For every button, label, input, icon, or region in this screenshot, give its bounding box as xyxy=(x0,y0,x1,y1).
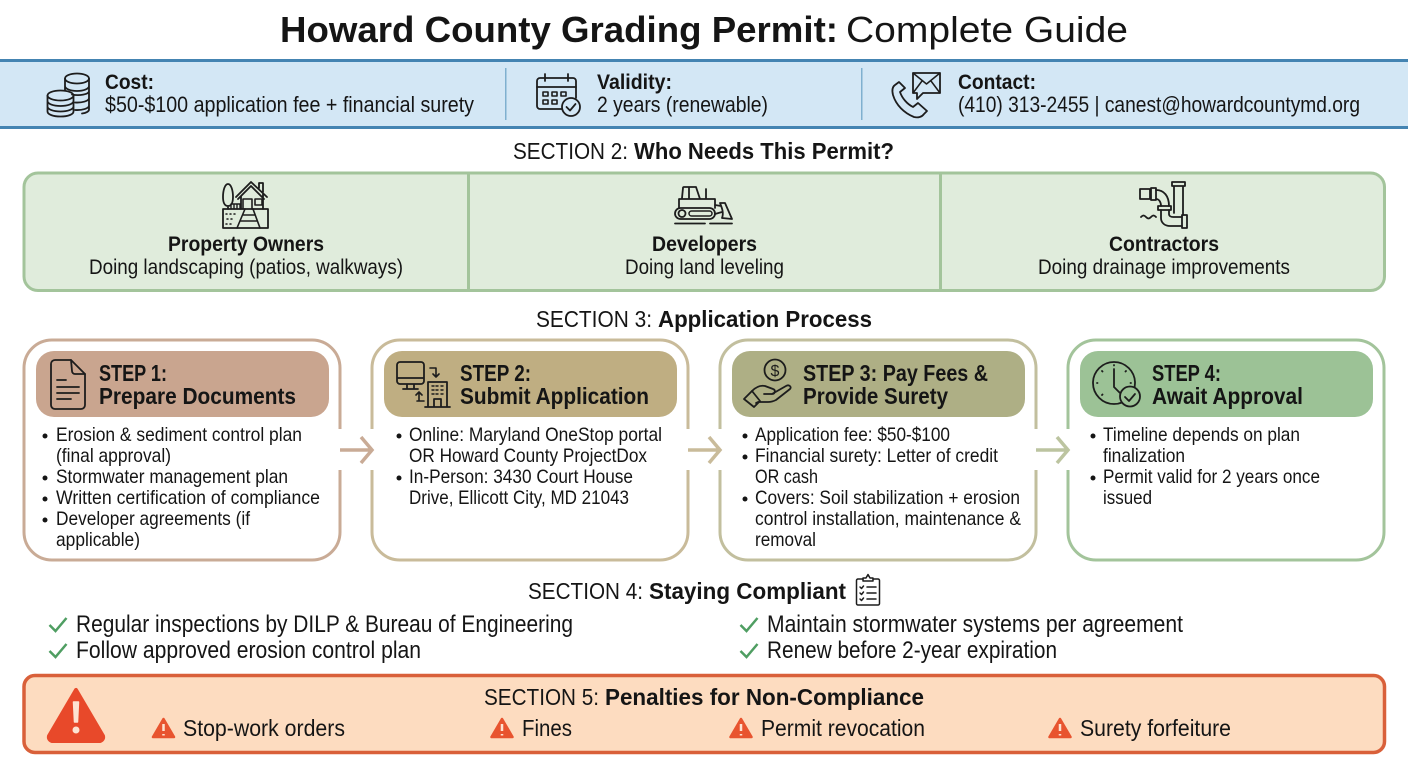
panel: step 1 xyxy=(24,340,340,560)
step 4 header xyxy=(1080,351,1373,417)
panel: step 3 xyxy=(720,340,1036,560)
step 3 list: OR cash xyxy=(755,466,818,488)
text: contractors: Contractors xyxy=(1109,233,1219,256)
text: developers xyxy=(625,233,784,279)
text: validity: 2 years (renewable) xyxy=(597,92,768,117)
text: property owners xyxy=(89,233,403,279)
step 1 header: STEP 1: xyxy=(99,360,167,386)
text: contractors: Doing drainage improvements xyxy=(1038,256,1290,279)
arrow: step 2 to step 3 xyxy=(688,437,720,463)
penalty: stop-work orders: Stop-work orders xyxy=(183,715,345,741)
step 1 header xyxy=(36,351,329,417)
step 2 header xyxy=(384,351,677,417)
text: cost: $50-$100 application fee + financial surety xyxy=(105,92,474,117)
step 3 header: Provide Surety xyxy=(803,383,948,409)
text: property owners: Property Owners xyxy=(168,233,324,256)
step 2 list: Online: Maryland OneStop portal xyxy=(409,424,662,446)
step 3 list xyxy=(742,424,1021,551)
icon: hand with coin xyxy=(744,360,791,407)
panel: step 2 xyxy=(372,340,688,560)
title: Howard County Grading Permit: xyxy=(280,9,838,50)
step 4 list: Timeline depends on plan xyxy=(1103,424,1300,446)
text: contractors xyxy=(1038,233,1290,279)
text: contact: Contact: xyxy=(958,71,1036,94)
penalty: permit revocation: Permit revocation xyxy=(761,715,925,741)
step 3 list: removal xyxy=(755,529,816,551)
icon: bulldozer xyxy=(675,187,732,224)
heading: section 4: SECTION 4: xyxy=(528,578,643,604)
heading: section 3 xyxy=(536,306,872,332)
step 1 list: (final approval) xyxy=(56,445,171,467)
heading: section 2: SECTION 2: xyxy=(513,138,628,164)
text: developers: Developers xyxy=(652,233,757,256)
icon: clock with check xyxy=(1093,362,1140,406)
text: contact: (410) 313-2455 | canest@howardcountymd.org xyxy=(958,92,1360,117)
step 3 header xyxy=(732,351,1025,417)
heading: section 4 xyxy=(528,578,846,604)
title xyxy=(280,9,1128,50)
arrow: step 3 to step 4 xyxy=(1036,437,1068,463)
icon: phone and envelope xyxy=(892,73,940,117)
step 2 list: Drive, Ellicott City, MD 21043 xyxy=(409,487,629,509)
list: compliance left: Follow approved erosion control plan xyxy=(76,637,421,664)
step 1 list: Developer agreements (if xyxy=(56,508,251,530)
step 3 list: Covers: Soil stabilization + erosion xyxy=(755,487,1020,509)
heading: section 3: SECTION 3: xyxy=(536,306,652,332)
icon: hand with coin: $ xyxy=(771,363,780,380)
text: validity: Validity: xyxy=(597,71,672,94)
icon: drain pipes xyxy=(1140,182,1187,228)
step 4 list: Permit valid for 2 years once xyxy=(1103,466,1320,488)
penalty: fines xyxy=(492,715,572,741)
step 1 list: Written certification of compliance xyxy=(56,487,320,509)
list: compliance left xyxy=(50,611,573,664)
step 3 list: Financial surety: Letter of credit xyxy=(755,445,999,467)
step 2 list: In-Person: 3430 Court House xyxy=(409,466,633,488)
icon: document xyxy=(51,360,85,409)
step 3 header: STEP 3: Pay Fees & xyxy=(803,360,988,386)
step 4 list: issued xyxy=(1103,487,1152,509)
heading: section 2: Who Needs This Permit? xyxy=(634,138,894,164)
step 3 list: control installation, maintenance & xyxy=(755,508,1021,530)
icon: coins xyxy=(48,74,89,116)
text: cost: Cost: xyxy=(105,71,154,94)
panel: penalties xyxy=(24,676,1384,752)
icon: computer and building xyxy=(397,362,450,407)
panel: who needs this permit xyxy=(24,173,1384,291)
step 3 list: Application fee: $50-$100 xyxy=(755,424,950,446)
text: developers: Doing land leveling xyxy=(625,256,784,279)
step 2 header: Submit Application xyxy=(460,383,649,409)
heading: section 3: Application Process xyxy=(658,306,872,332)
penalty: fines: Fines xyxy=(522,715,572,741)
list: compliance left: Regular inspections by DILP & Bureau of Engineering xyxy=(76,611,573,638)
icon: clipboard checklist xyxy=(856,574,880,605)
heading: section 2 xyxy=(513,138,894,164)
text: validity xyxy=(597,71,768,117)
heading: section 5: Penalties for Non-Compliance xyxy=(605,684,924,710)
panel: key facts bar xyxy=(0,59,1408,129)
text: contact xyxy=(958,71,1360,117)
step 2 list: OR Howard County ProjectDox xyxy=(409,445,647,467)
icon: large warning xyxy=(49,690,103,741)
step 1 list: Stormwater management plan xyxy=(56,466,288,488)
icon: house xyxy=(223,182,268,228)
heading: section 4: Staying Compliant xyxy=(649,578,846,604)
panel: step 4 xyxy=(1068,340,1384,560)
list: compliance right: Maintain stormwater systems per agreement xyxy=(767,611,1183,638)
text: cost xyxy=(105,71,474,117)
step 4 list xyxy=(1090,424,1320,509)
penalty: surety forfeiture: Surety forfeiture xyxy=(1080,715,1231,741)
title: Complete Guide xyxy=(846,9,1128,50)
step 1 header: Prepare Documents xyxy=(99,383,296,409)
list: compliance right xyxy=(740,611,1183,664)
heading: section 5: SECTION 5: xyxy=(484,684,599,710)
step 1 list: Erosion & sediment control plan xyxy=(56,424,302,446)
icon: calendar with check xyxy=(537,74,580,116)
step 4 list: finalization xyxy=(1103,445,1185,467)
step 1 list: applicable) xyxy=(56,529,140,551)
step 4 header: STEP 4: xyxy=(1152,360,1221,386)
step 1 list xyxy=(42,424,320,551)
list: compliance right: Renew before 2-year expiration xyxy=(767,637,1057,664)
arrow: step 1 to step 2 xyxy=(340,437,372,463)
step 4 header: Await Approval xyxy=(1152,383,1303,409)
step 2 header: STEP 2: xyxy=(460,360,531,386)
step 2 list xyxy=(396,424,662,509)
text: property owners: Doing landscaping (patios, walkways) xyxy=(89,256,403,279)
